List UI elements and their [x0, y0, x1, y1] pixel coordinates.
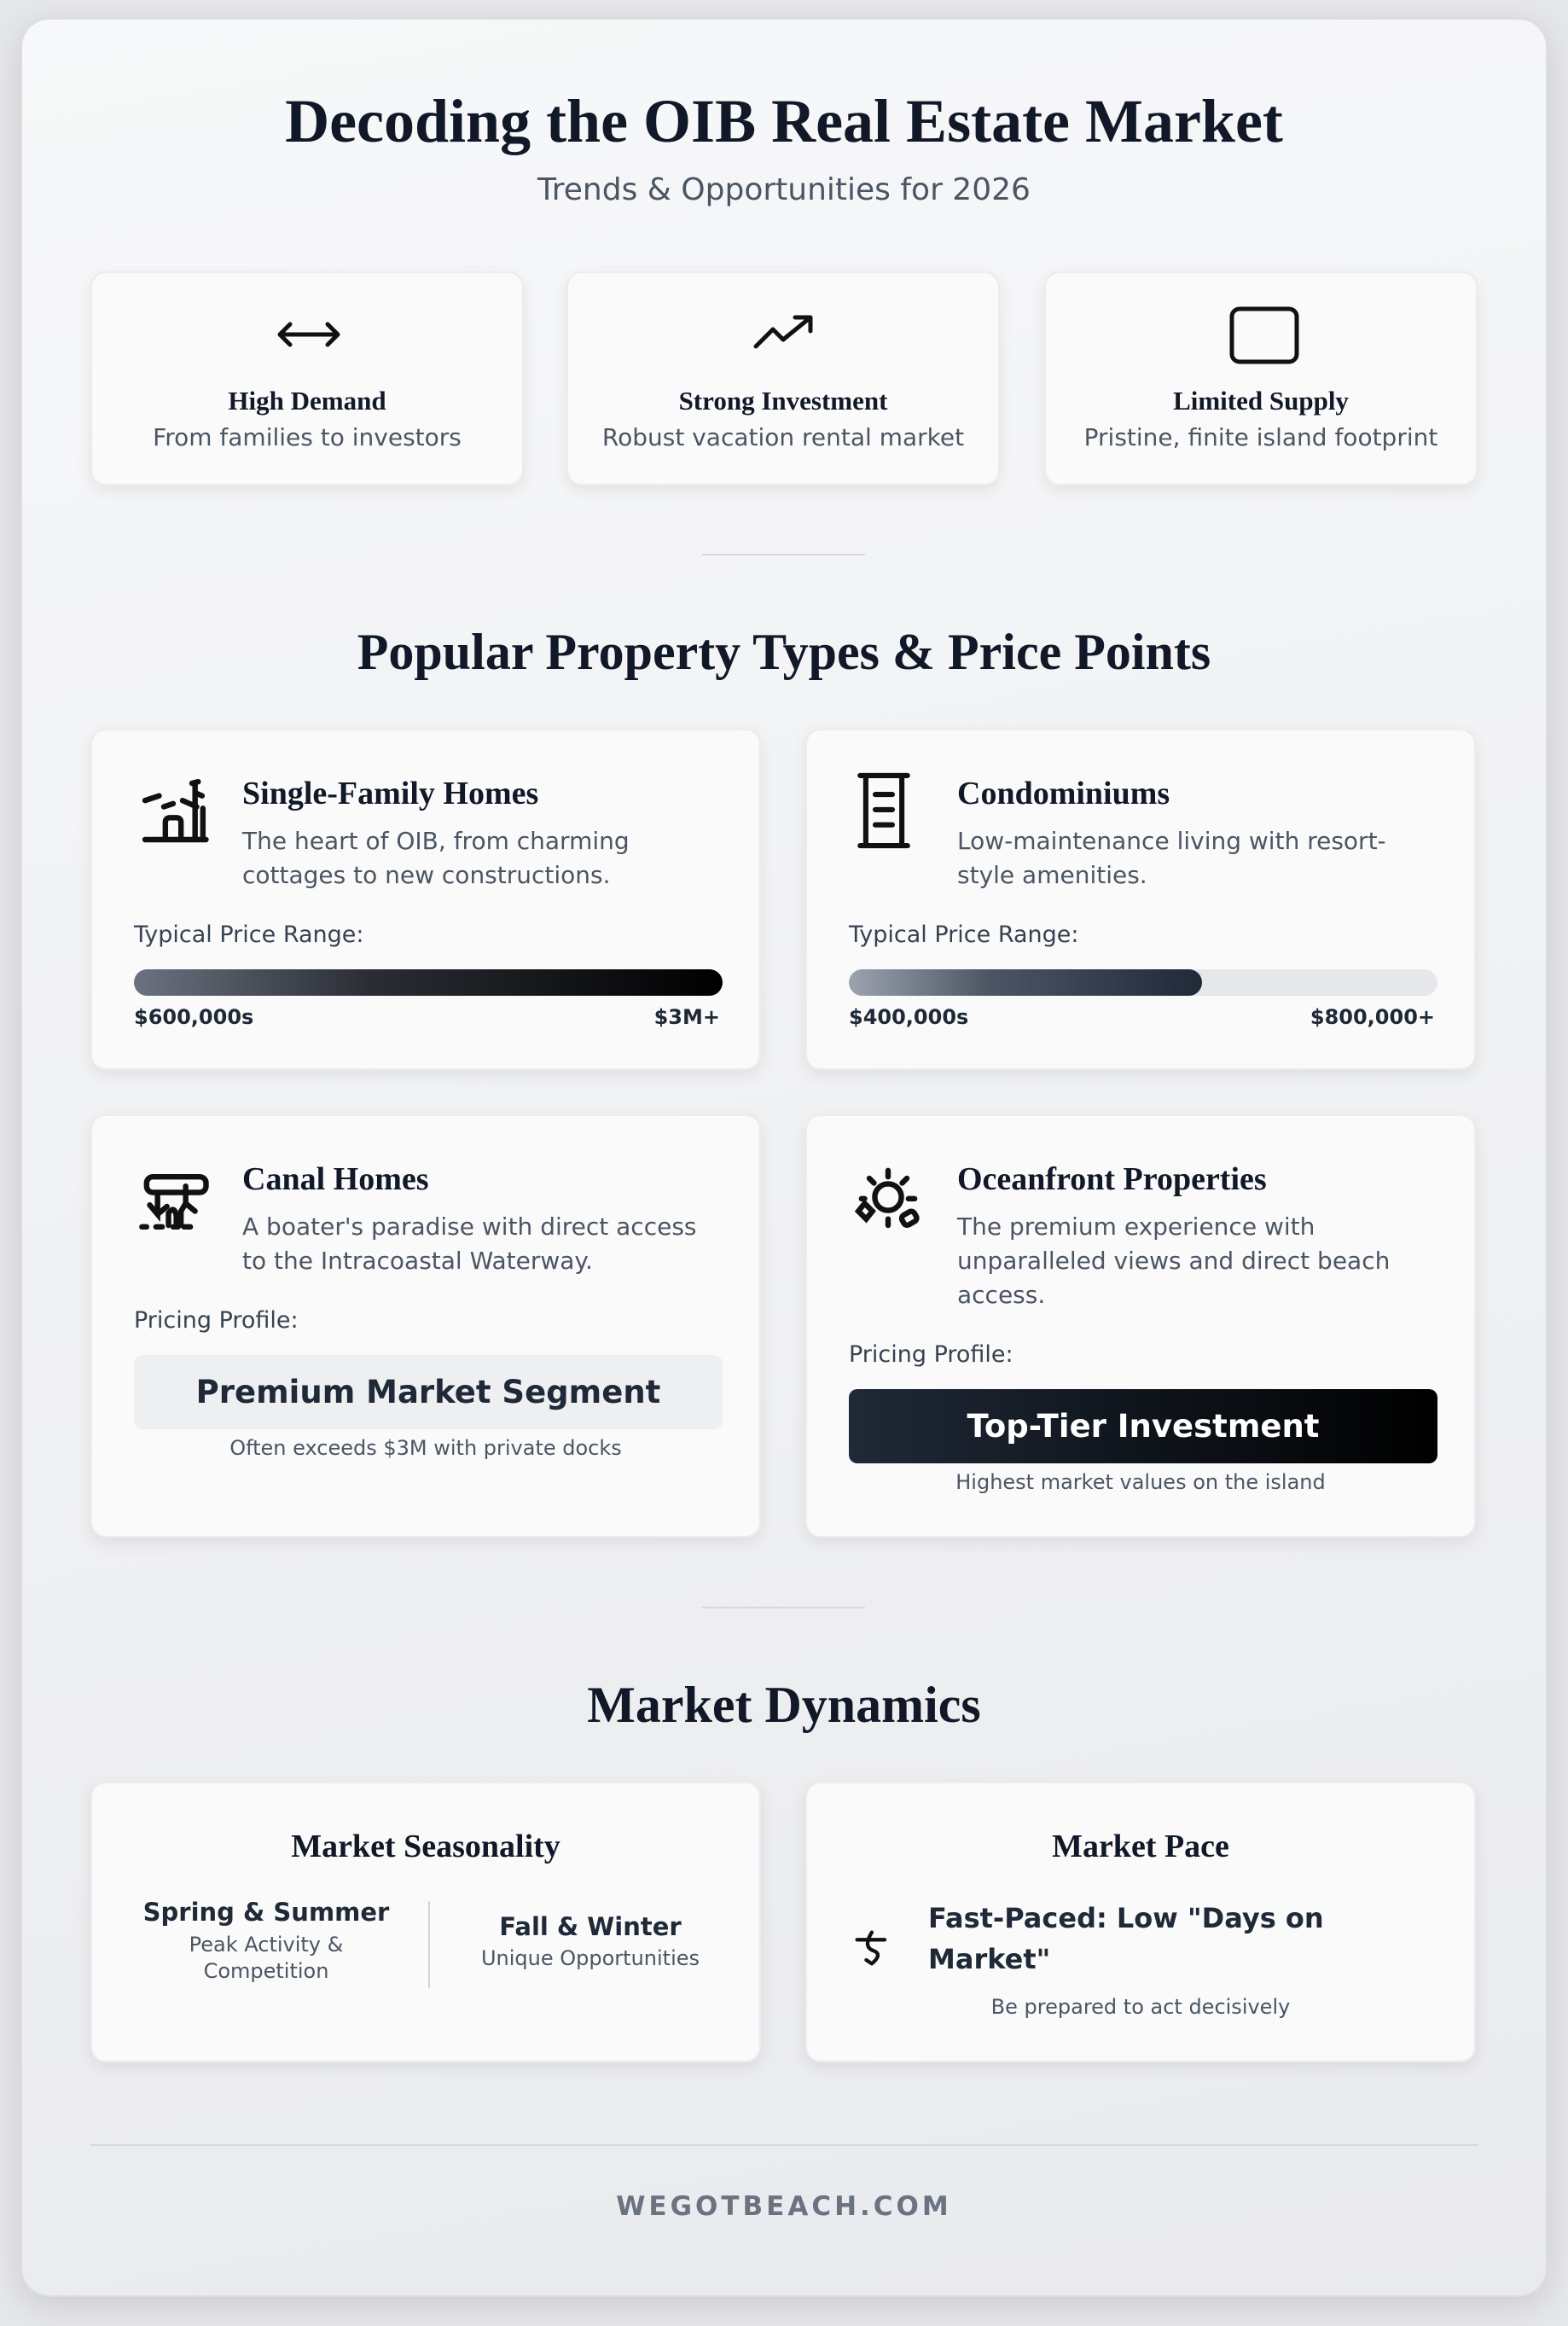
column: spring: Peak Activity &	[189, 1933, 343, 1957]
subtitle: Trends & Opportunities for 2026	[537, 172, 1031, 207]
panel: canal homes	[90, 1114, 761, 1538]
badge: premium: Premium Market Segment	[196, 1374, 660, 1410]
price bar	[134, 969, 723, 996]
column: spring: Competition	[204, 1959, 328, 1983]
badge: top-tier: Top-Tier Investment	[967, 1408, 1319, 1445]
panel: canal homes: A boater's paradise with direct access to the Intracoastal Waterway.	[242, 1212, 696, 1275]
panel: oceanfront: Highest market values on the island	[955, 1470, 1326, 1494]
feature card: strong investment	[566, 271, 1000, 486]
panel: market pace: Market Pace	[1052, 1829, 1229, 1864]
icon: square	[1230, 307, 1298, 363]
title: Decoding the OIB Real Estate Market	[285, 87, 1283, 155]
panel: single-family homes: The heart of OIB, from charming cottages to new constructions.	[242, 827, 630, 889]
feature card: limited supply: Limited Supply	[1173, 386, 1349, 416]
panel: single-family homes: Typical Price Range:	[134, 922, 363, 948]
panel: seasonality: Market Seasonality	[291, 1829, 560, 1864]
heading: property types: Popular Property Types & Price Points	[357, 624, 1211, 680]
icon: house	[142, 779, 209, 843]
panel: oceanfront: Pricing Profile:	[849, 1341, 1013, 1368]
feature card: strong investment: Strong Investment	[679, 386, 887, 416]
icon: trend	[754, 316, 812, 348]
panel: market pace: Fast-Paced: Low "Days on Market"	[928, 1902, 1324, 1975]
column: fall	[481, 1912, 700, 1970]
icon: arrows	[278, 323, 340, 346]
icon: building	[857, 773, 910, 848]
icon: sun	[855, 1167, 920, 1229]
panel: condominiums: Typical Price Range:	[849, 922, 1078, 948]
heading: market dynamics: Market Dynamics	[587, 1677, 981, 1733]
panel: oceanfront	[805, 1114, 1476, 1538]
panel: single-family homes	[90, 729, 761, 1070]
panel: condominiums	[805, 729, 1476, 1070]
panel: single-family homes: $3M+	[654, 1005, 720, 1029]
panel: oceanfront: The premium experience with unparalleled views and direct beach access.	[957, 1212, 1390, 1309]
icon: pace	[855, 1930, 887, 1966]
feature card: high demand	[90, 271, 524, 486]
column: fall: Unique Opportunities	[481, 1946, 700, 1970]
icon: canal	[139, 1174, 209, 1230]
feature card: high demand: From families to investors	[153, 423, 462, 451]
panel: market pace: Be prepared to act decisively	[991, 1995, 1290, 2019]
column: spring	[143, 1898, 389, 1983]
panel: condominiums: Condominiums	[957, 776, 1170, 811]
price bar	[849, 969, 1437, 996]
feature card: strong investment: Robust vacation rental market	[602, 423, 964, 451]
panel: condominiums: $800,000+	[1310, 1005, 1435, 1029]
panel: oceanfront: Oceanfront Properties	[957, 1161, 1267, 1197]
feature card: limited supply	[1044, 271, 1478, 486]
footer: WEGOTBEACH.COM	[616, 2191, 952, 2222]
feature card: limited supply: Pristine, finite island footprint	[1084, 423, 1437, 451]
column: spring: Spring & Summer	[143, 1898, 389, 1927]
panel: single-family homes: $600,000s	[134, 1005, 253, 1029]
panel: canal homes: Canal Homes	[242, 1161, 428, 1197]
column: fall: Fall & Winter	[499, 1912, 682, 1941]
panel: canal homes: Often exceeds $3M with private docks	[229, 1436, 622, 1460]
feature card: high demand: High Demand	[228, 386, 386, 416]
badge: premium	[134, 1355, 723, 1429]
panel: market pace	[805, 1782, 1476, 2062]
panel: condominiums: $400,000s	[849, 1005, 968, 1029]
panel: canal homes: Pricing Profile:	[134, 1307, 299, 1334]
badge: top-tier	[849, 1389, 1437, 1463]
panel: seasonality	[90, 1782, 761, 2062]
panel: condominiums: Low-maintenance living with resort-style amenities.	[957, 827, 1386, 889]
panel: single-family homes: Single-Family Homes	[242, 776, 538, 811]
